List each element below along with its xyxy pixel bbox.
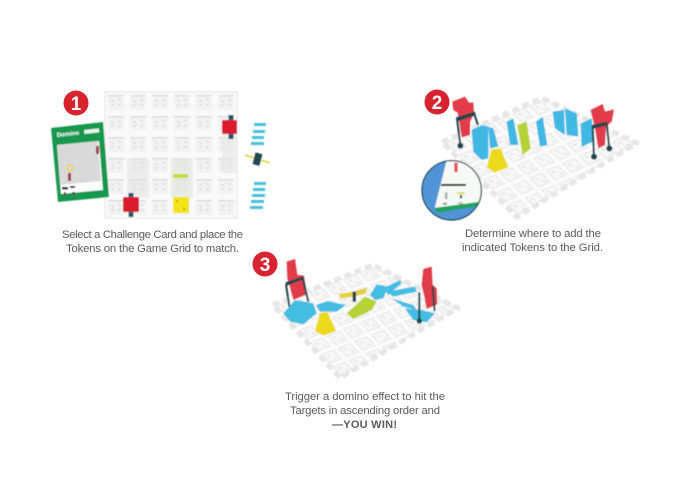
badge 1 <box>64 90 88 116</box>
right red target <box>417 267 437 324</box>
step 2 caption: indicated Tokens to the Grid. <box>462 242 603 254</box>
step 3 caption: Trigger a domino effect to hit the <box>285 391 445 403</box>
step 3 caption: —YOU WIN! <box>332 419 397 431</box>
yellow trigger <box>487 148 508 173</box>
step 1 caption <box>62 229 243 255</box>
yellow trigger <box>315 312 336 336</box>
step 2 illustration <box>422 97 637 220</box>
badge 2 <box>424 90 450 114</box>
magnified card inset <box>422 160 483 220</box>
game grid, perspective view <box>273 265 458 378</box>
step 1 caption: Tokens on the Game Grid to match. <box>66 243 239 255</box>
badge 3 <box>252 252 278 276</box>
step 1 illustration <box>51 92 270 218</box>
challenge card: Domino <box>57 131 80 139</box>
badge 1: 1 <box>71 94 82 115</box>
fallen blue dominoes <box>283 280 435 324</box>
yellow trigger token <box>173 197 189 213</box>
blue dominoes <box>472 108 593 160</box>
step 2 caption <box>462 228 603 254</box>
step 3 illustration <box>273 259 458 378</box>
magnified card inset: ×1 <box>458 200 464 205</box>
left red target <box>452 97 478 149</box>
green domino token <box>173 174 188 178</box>
step 3 caption <box>285 391 445 431</box>
game grid, flat view <box>105 92 237 218</box>
blue domino tokens, upper stack <box>251 123 266 145</box>
red target token, bottom left <box>123 193 139 217</box>
left red target <box>285 259 308 307</box>
step 3 caption: Targets in ascending order and <box>290 405 440 417</box>
badge 2: 2 <box>432 93 442 114</box>
green domino <box>347 297 377 319</box>
step 1 caption: Select a Challenge Card and place the <box>62 229 243 241</box>
green domino <box>517 122 531 155</box>
badge 3: 3 <box>260 255 270 276</box>
step 2 caption: Determine where to add the <box>465 228 601 240</box>
blue domino tokens, lower stack <box>250 182 266 209</box>
magnified card inset: ×8 <box>442 201 448 206</box>
red target token, top right <box>222 115 237 139</box>
spinner token <box>245 152 270 166</box>
spinner <box>339 288 367 302</box>
right red target <box>591 104 614 160</box>
challenge card <box>51 122 109 202</box>
game grid, perspective view <box>442 98 637 217</box>
